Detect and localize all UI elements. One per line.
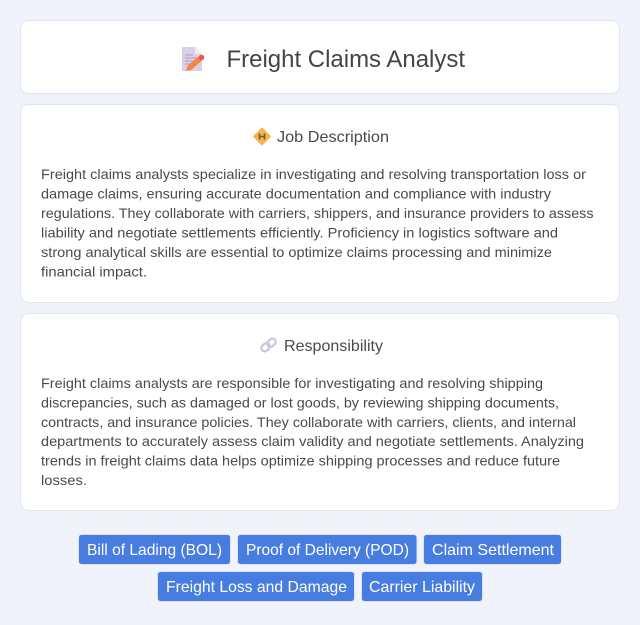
icon: chain link bbox=[260, 337, 277, 353]
text block: job description bbox=[41, 166, 594, 280]
tag: claim settlement: Claim Settlement bbox=[432, 542, 555, 559]
text block: responsibility: losses. bbox=[41, 472, 87, 488]
text block: job description: financial impact. bbox=[41, 264, 147, 280]
tag: bill of lading: Bill of Lading (BOL) bbox=[87, 542, 222, 559]
text block: job description: regulations. They collaborate with carriers, shippers, and insurance providers to assess bbox=[41, 205, 594, 221]
tag: proof of delivery: Proof of Delivery (POD) bbox=[246, 542, 409, 559]
text block: responsibility: discrepancies, such as damaged or lost goods, by reviewing shipping documents, bbox=[41, 394, 559, 410]
tags bbox=[78, 534, 562, 602]
heading: responsibility: Responsibility bbox=[284, 338, 383, 355]
text block: responsibility bbox=[41, 375, 584, 488]
tag: bill of lading bbox=[78, 534, 230, 564]
title: Freight Claims Analyst bbox=[226, 46, 465, 73]
text block: responsibility: contracts, and insurance policies. They collaborate with carriers, clients, and internal bbox=[41, 414, 576, 430]
panel: responsibility bbox=[20, 314, 620, 510]
heading: job description: Job Description bbox=[277, 129, 389, 146]
text block: responsibility: departments to accurately assess claim validity and negotiate settlements. Analyzing bbox=[41, 433, 584, 449]
tag: proof of delivery bbox=[238, 534, 417, 564]
text block: job description: damage claims, ensuring accurate documentation and compliance with industry bbox=[41, 186, 551, 202]
text block: job description: strong analytical skills are essential to optimize claims processing and minimize bbox=[41, 244, 552, 260]
icon: document with pencil bbox=[182, 47, 204, 71]
text block: responsibility: Freight claims analysts are responsible for investigating and resolving shipping bbox=[41, 375, 543, 391]
panel: job description bbox=[20, 104, 620, 302]
panel: title card bbox=[20, 20, 620, 94]
tag: claim settlement bbox=[424, 534, 562, 564]
tag: carrier liability: Carrier Liability bbox=[369, 579, 475, 596]
tag: freight loss and damage: Freight Loss and Damage bbox=[166, 579, 347, 596]
tag: freight loss and damage bbox=[158, 572, 354, 602]
text block: job description: liability and negotiate settlements efficiently. Proficiency in logistics software and bbox=[41, 224, 558, 240]
tag: carrier liability bbox=[362, 572, 482, 602]
icon: road sign bbox=[254, 128, 270, 145]
text block: job description: Freight claims analysts specialize in investigating and resolving transportation loss or bbox=[41, 166, 586, 182]
text block: responsibility: trends in freight claims data helps optimize shipping processes and reduce future bbox=[41, 452, 560, 468]
